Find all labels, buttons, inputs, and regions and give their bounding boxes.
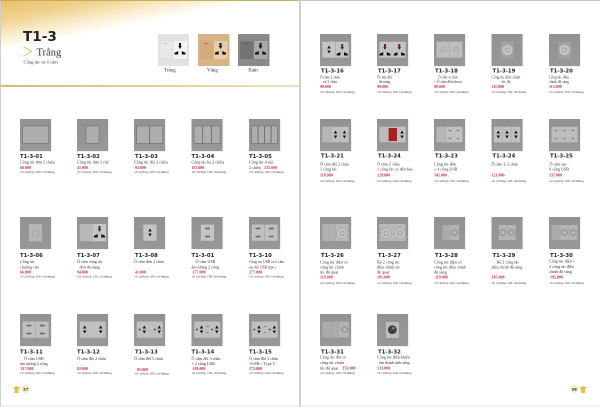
packaging: 10 cái/hộp 100 cái/thùng [20,371,55,375]
product: T1-3-25 [549,119,584,183]
description: Ổ cắm đôi 2 chấu [320,162,349,166]
product: T1-3-13 [134,314,169,376]
heading block [23,29,62,64]
description: + 2 cổng USB [192,361,215,366]
packaging: 10 cái/hộp 100 cái/thùng [549,179,584,183]
number badge [22,386,29,392]
packaging: 10 cái/hộp 100 cái/thùng [320,90,355,94]
plate [77,119,109,152]
description: điều chỉnh độ sáng [492,264,522,270]
description: Ổ cắm đôi 3 chấu [134,356,163,361]
description: Ổ cắm 2 chấu [377,162,400,166]
price: 99.000 [377,84,388,89]
packaging: 10 cái/hộp 100 cái/thùng [492,179,526,183]
plate [434,119,466,152]
packaging: 10 cái/hộp 100 cái/thùng [249,170,284,174]
description: Bộ 2 công tắc [496,260,519,264]
code: T1-3-08 [135,253,158,259]
code: T1-3-19 [492,69,516,75]
description: Công tắc điện + [549,258,575,264]
description: Ổ cắm đôi 2 chấu [77,356,106,361]
product: T1-3-05 [249,119,284,174]
product: T1-3-29 [492,217,526,285]
plate [434,217,466,250]
packaging: 10 cái/hộp 100 cái/thùng [434,179,469,183]
description: Ổ cắm 3, 2 chấu [492,162,518,168]
code: T1-3-11 [20,350,43,356]
plate [377,217,409,250]
plate [20,314,52,347]
description: Công tắc điện có [434,260,462,264]
plate [134,119,166,152]
product: T1-3-23 [434,119,469,183]
product: T1-3-32 [377,314,412,375]
description: công tắc chỉnh [320,360,344,365]
price: 277.000 [249,270,262,274]
packaging: 10 cái/hộp 100 cái/thùng [492,90,526,94]
product: T1-3-15 [249,314,284,375]
code: T1-3-05 [249,154,272,160]
product: T1-3-06 [20,217,55,278]
price: 60.000 [20,165,31,170]
packaging: 10 cái/hộp 100 cái/thùng [192,371,226,375]
packaging: 10 cái/hộp 100 cái/thùng [377,371,412,375]
packaging: 10 cái/hộp 100 cái/thùng [377,179,412,183]
number: 27 [23,387,29,391]
packaging: 10 cái/hộp 100 cái/thùng [377,281,412,285]
packaging: 10 cái/hộp 100 cái/thùng [134,372,169,376]
description: Ổ cắm đôi 3 chấu [192,356,220,361]
description: chuông cửa [20,264,39,269]
colour swatches [158,34,270,74]
code: T1-3-16 [321,69,344,75]
packaging: 10 cái/hộp 100 cái/thùng [77,170,112,174]
product: T1-3-11 [20,314,55,375]
plate [77,314,109,347]
description: Công tắc điều [549,76,569,80]
code: T1-3-06 [20,253,43,259]
description: Công tắc [20,259,35,264]
description: + 4 cổng USB [434,166,458,172]
plate [249,119,281,152]
swatch: gold: Vàng [207,68,218,74]
subtitle: Trắng [36,48,62,58]
icon: gold figure [12,386,21,393]
packaging: 10 cái/hộp 100 cái/thùng [249,371,284,375]
description: Bộ 2 công tắc [377,260,400,264]
description: âm tường 4 cổng [20,361,48,366]
code: T1-3-28 [435,253,458,259]
packaging: 10 cái/hộp 100 cái/thùng [377,90,412,94]
code: T1-3-04 [192,154,215,160]
price: 115.000 [192,165,204,170]
description: âm thanh ánh sáng [379,360,410,365]
plate [492,34,524,67]
product: T1-3-14 [192,314,226,375]
description: Công tắc đơn 2 chiều [20,160,55,164]
description: Công tắc đôi có [320,355,346,360]
description: Công tắc đơn [434,162,456,166]
description: điều chỉnh tốc [377,264,400,270]
description: tốc độ quạt [320,365,339,370]
price: 185.000 [492,274,504,280]
description: Ổ cắm USB [24,356,44,361]
plate [377,119,409,152]
description: Ổ cắm USB [196,259,215,264]
packaging: 10 cái/hộp 100 cái/thùng [549,281,584,285]
code: T1-3-01 [192,253,215,259]
price: 118.000 [320,172,333,178]
description: âm tường 2 cổng [192,264,219,269]
plate [77,217,109,250]
plate [549,119,581,152]
product: T1-3-31 [320,314,356,375]
product: T1-3-24 [377,119,413,183]
code: T1-3-29 [492,253,516,259]
product: T1-3-26 [320,217,355,285]
plate [377,314,409,347]
code: T1-3-02 [77,154,100,160]
price: 109.000 [192,366,206,371]
plate [434,34,466,67]
description: 1 công tắc [320,166,337,172]
code: T1-3-17 [378,69,401,75]
price: 177.000 [192,270,206,274]
plate [320,314,352,347]
price: 82.000 [77,366,88,371]
description: Công tắc ba 2 chiều [192,160,224,164]
product: T1-3-17 [377,34,412,94]
plate [192,119,224,152]
description: Ổ cắm 2 chấu [320,76,340,80]
packaging: 10 cái/hộp 100 cái/thùng [320,179,355,183]
code: T1-3-20 [550,69,573,75]
description: sạc đôi USB type c [249,265,277,269]
page number 27 [12,386,29,393]
code: T1-3-15 [249,350,272,356]
product: T1-3-02 [77,119,112,174]
description: và 3 chấu [323,80,337,84]
packaging: 10 cái/hộp 100 cái/thùng [134,274,169,278]
price: 192.000 [550,274,563,280]
price: 99.000 [434,84,445,89]
product: T1-3-24 [492,119,526,183]
packaging: 10 cái/hộp 100 cái/thùng [77,274,112,278]
description: chỉnh độ sáng [549,80,569,84]
description: Công tắc đơn 2 chế [77,160,109,164]
packaging: 10 cái/hộp 100 cái/thùng [320,281,355,285]
price: 90.000 [320,84,331,89]
code: T1-3-24 [378,154,401,160]
price: 172.000 [249,366,262,371]
top gold line [0,0,299,1]
code: T1-3-01 [20,154,43,160]
price: 337.000 [549,172,562,178]
product: T1-3-28 [434,217,469,285]
description: Công tắc đôi 2 chiều [134,160,168,164]
price: 152.000 [342,366,356,370]
plate [192,217,224,250]
plate [249,314,281,347]
plate [134,217,166,250]
swatch: grey: Xám [248,68,258,74]
plate [249,217,281,250]
packaging: 10 cái/hộp 100 cái/thùng [320,371,355,375]
plate [192,314,224,347]
code: T1-3-13 [135,350,158,356]
description: Công tắc điều khiển [377,355,410,360]
title: T1-3 [23,29,57,45]
code: T1-3-27 [378,253,401,259]
code: T1-3-31 [321,350,344,356]
product: T1-3-09 [192,217,226,278]
packaging: 10 cái/hộp 100 cái/thùng [134,170,169,174]
packaging: 10 cái/hộp 100 cái/thùng [434,281,469,285]
chevron arrow [24,46,32,56]
price: 41.000 [135,270,146,274]
price: 113.000 [549,84,562,89]
price: 93.000 [135,165,146,170]
product: T1-3-10 [249,217,284,278]
price: 129.000 [377,172,390,178]
description: chỉnh độ sáng [549,269,572,274]
description: công tắc chỉnh [320,264,344,270]
price: 317.000 [20,366,34,371]
product: T1-3-01 [20,119,55,174]
code: T1-3-32 [378,350,401,356]
price: 119.000 [320,274,333,280]
price: 94.000 [77,270,88,274]
plate [320,34,352,67]
code: T1-3-25 [550,154,573,160]
code: T1-3-07 [77,253,100,259]
code: T1-3-26 [321,253,344,259]
price: 119.000 [435,274,448,280]
product: T1-3-16 [320,34,355,94]
code: T1-3-12 [77,350,100,356]
price: 85.000 [137,367,148,372]
description: Công tắc điều chỉnh [492,76,520,80]
product: T1-3-03 [134,119,169,174]
price: 111.000 [492,84,504,89]
description: độ quạt [377,270,390,274]
description: đơn đa năng [80,264,100,269]
description: độ sáng [434,270,447,274]
description: 2 công tắc điều [549,264,574,269]
packaging: 10 cái/hộp 100 cái/thùng [549,90,584,94]
header gold gradient [1,1,262,52]
price: 341.000 [434,172,447,178]
code: T1-3-10 [249,253,272,259]
packaging: 10 cái/hộp 100 cái/thùng [192,170,226,174]
description: +USB + Type C [249,361,276,366]
description: tốc độ quạt [320,270,339,274]
description: + Ổ cắm điện thoại [434,79,462,84]
product: T1-3-04 [192,119,226,174]
plate [549,34,581,67]
packaging: 10 cái/hộp 100 cái/thùng [434,90,469,94]
swatch: white: Trắng [164,68,176,74]
header separator line [0,85,299,87]
product: T1-3-07 [77,217,112,278]
packaging: 10 cái/hộp 100 cái/thùng [192,274,226,278]
icon: gold figure [579,386,588,393]
description: công tắc điều chỉnh [434,264,466,270]
code: T1-3-18 [435,69,458,75]
product: T1-3-21 [320,119,355,183]
plate [549,217,581,250]
plate [20,119,52,152]
description: đa năng [379,80,390,84]
price: 66.000 [20,270,31,274]
description: Công tắc điện có [320,260,348,264]
price: 121.000 [492,172,504,178]
packaging: 10 cái/hộp 100 cái/thùng [20,170,55,174]
plate [20,217,52,250]
code: T1-3-21 [321,154,344,160]
code: T1-3-23 [435,154,458,160]
description: Công tắc 4 nút [249,160,274,164]
packaging: 10 cái/hộp 100 cái/thùng [20,274,55,278]
product: T1-3-12 [77,314,112,375]
product: T1-3-20 [549,34,584,94]
number badge [571,386,578,392]
packaging: 10 cái/hộp 100 cái/thùng [77,371,112,375]
page number 28 [571,386,588,393]
product: T1-3-18 [434,34,469,94]
description: 1 công tắc có đèn báo [377,166,413,172]
price: 181.000 [377,274,390,280]
code: T1-3-30 [550,253,573,259]
description: Ổ cắm đôi [377,76,392,80]
packaging: 10 cái/hộp 100 cái/thùng [249,274,284,278]
price: 41.000 [77,165,88,170]
description line 2 and price: 2 chiều 133.000 [249,165,277,170]
code: T1-3-03 [135,154,158,160]
description: Ổ cắm đôi 3 chấu [249,356,278,361]
description: Ổ cắm công tắc [77,259,103,264]
plate [134,314,166,347]
description: tốc độ [502,80,511,84]
price: 133.000 [377,366,390,370]
plate [320,217,352,250]
packaging: 10 cái/hộp 100 cái/thùng [492,281,526,285]
description: Ổ cắm sạc [550,162,567,166]
plate [492,217,524,250]
product: T1-3-19 [492,34,526,94]
description: Cổng sạc USB có ổ cắm [249,260,284,264]
description: 6 cổng USB [549,166,569,172]
plate [377,34,409,67]
category text: Công tắc và ổ cắm [24,60,58,64]
plate [492,119,524,152]
code: T1-3-14 [192,350,215,356]
plate [320,119,352,152]
number: 28 [572,387,577,391]
description: Ổ cắm đơn 2 chấu [134,259,164,264]
description: Ổ cắm vi tính [438,76,458,80]
product: T1-3-08 [134,217,169,278]
product: T1-3-30 [549,217,584,285]
product: T1-3-27 [377,217,412,285]
code: T1-3-24 [492,154,516,160]
